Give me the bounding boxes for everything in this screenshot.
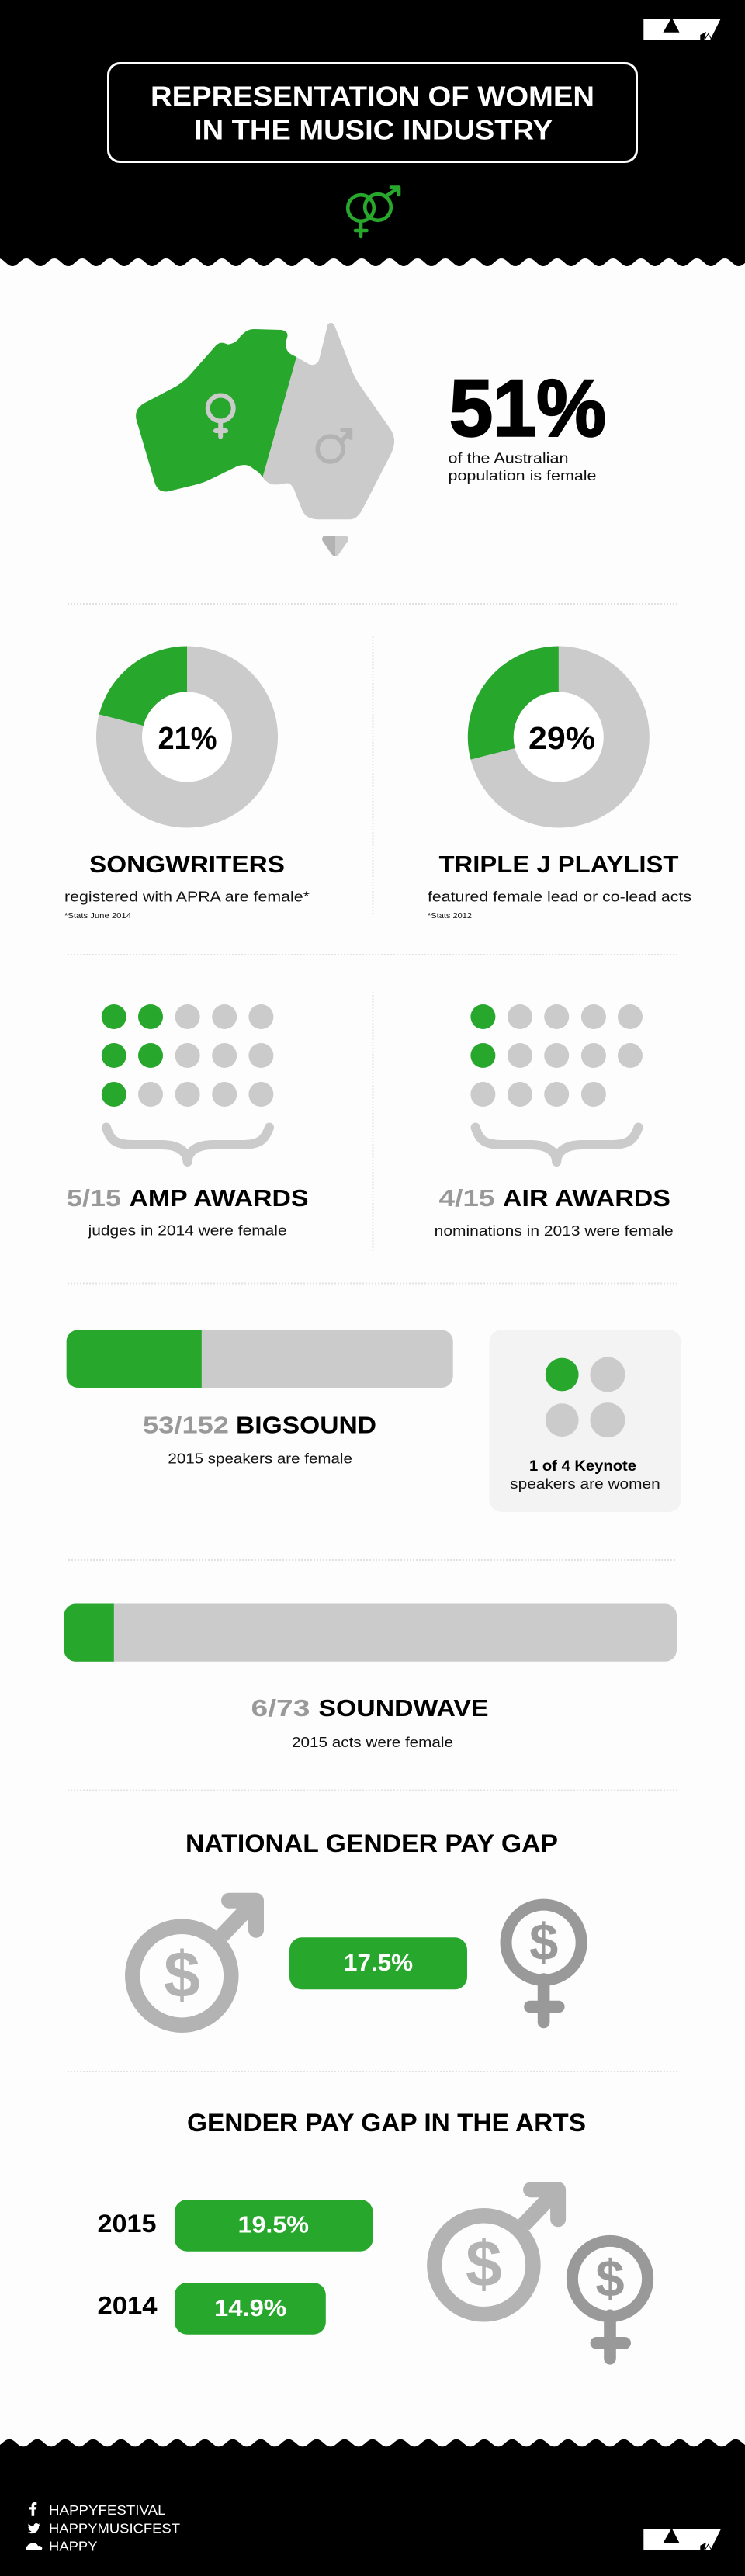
donut chart: 29% xyxy=(468,646,650,827)
header black wavy background xyxy=(0,0,745,266)
heading: triple j playlist: TRIPLE J PLAYLIST xyxy=(439,851,679,878)
brace xyxy=(476,1127,639,1162)
panel: keynote card: 1 of 4 Keynote xyxy=(529,1458,636,1475)
panel: songwriters xyxy=(64,646,310,920)
icon: mars with dollar: $ xyxy=(164,1938,200,2011)
panel: triple j playlist xyxy=(428,646,691,920)
brace xyxy=(106,1127,269,1162)
text: population caption: population is female xyxy=(449,467,596,484)
heading: 53/152 bigsound xyxy=(143,1411,376,1439)
heading: 53/152 bigsound: 53/152 xyxy=(143,1411,229,1439)
icon: mars on map xyxy=(317,430,351,462)
panel: keynote card: speakers are women xyxy=(510,1475,660,1492)
text: population caption xyxy=(449,450,596,484)
bar chart: 53 of 152 xyxy=(67,1330,453,1388)
Tasmania xyxy=(322,536,335,556)
panel: national gender pay gap xyxy=(133,1829,581,2025)
row: 2014: 2014 xyxy=(98,2292,158,2320)
icon: mars with dollar xyxy=(435,2189,558,2314)
heading: 6/73 soundwave: 6/73 xyxy=(251,1694,310,1721)
panel: soundwave xyxy=(64,1603,677,1750)
panel: header xyxy=(0,0,745,266)
row: 2015: 19.5% xyxy=(237,2211,309,2238)
dot grid: 5 of 15 xyxy=(102,1004,273,1107)
icon: venus with dollar xyxy=(572,2241,648,2359)
heading: 5/15 AMP awards: 5/15 xyxy=(67,1185,121,1212)
text: population caption: of the Australian xyxy=(449,450,568,466)
text: songwriters caption: registered with APRA are female* xyxy=(64,889,310,905)
footer black wavy background xyxy=(0,2439,745,2576)
text: AMP caption: judges in 2014 were female xyxy=(87,1222,287,1239)
logo: top right xyxy=(643,19,721,40)
donut chart: 21% xyxy=(96,646,278,827)
heading: 4/15 AIR awards: 4/15 xyxy=(439,1185,495,1212)
panel: bigsound xyxy=(67,1330,681,1512)
map of Australia split by gender xyxy=(136,323,394,556)
text: social handles: HAPPYFESTIVAL xyxy=(49,2502,166,2518)
panel: gender pay gap in the arts xyxy=(98,2109,648,2359)
note: songwriters stats date: *Stats June 2014 xyxy=(64,911,131,920)
title box xyxy=(109,64,636,161)
logo: bottom right xyxy=(643,2529,721,2550)
bar chart: 6 of 73 xyxy=(64,1603,677,1662)
text: triple j caption: featured female lead or co-lead acts xyxy=(428,889,691,905)
icon: mars with dollar: $ xyxy=(466,2228,502,2300)
heading: 5/15 AMP awards: AMP AWARDS xyxy=(129,1185,309,1212)
note: triple j stats date: *Stats 2012 xyxy=(428,911,472,920)
row: 2014 xyxy=(98,2283,326,2335)
panel: AIR awards xyxy=(435,1004,674,1239)
text: social handles: HAPPYMUSICFEST xyxy=(49,2520,180,2536)
row: 2014: 14.9% xyxy=(214,2294,286,2321)
heading: 53/152 bigsound: BIGSOUND xyxy=(236,1411,376,1439)
heading: 5/15 AMP awards xyxy=(67,1185,309,1212)
icon: venus on map xyxy=(208,396,234,436)
heading: 6/73 soundwave xyxy=(251,1694,489,1721)
text: bigsound caption: 2015 speakers are female xyxy=(168,1450,352,1467)
stat: 51%: 51% xyxy=(449,363,606,453)
panel: Australia population xyxy=(136,323,606,556)
text: AIR caption: nominations in 2013 were female xyxy=(435,1222,674,1239)
heading: songwriters: SONGWRITERS xyxy=(89,851,285,878)
heading: national gender pay gap: NATIONAL GENDER PAY GAP xyxy=(185,1829,558,1857)
title box: IN THE MUSIC INDUSTRY xyxy=(194,115,553,146)
icon: green gender symbols xyxy=(348,188,399,237)
pill: 17.5% xyxy=(289,1937,467,1989)
pill: 17.5%: 17.5% xyxy=(344,1949,413,1976)
heading: 4/15 AIR awards: AIR AWARDS xyxy=(503,1185,670,1212)
text: social handles xyxy=(49,2502,180,2554)
icon: twitter xyxy=(28,2523,40,2533)
heading: 4/15 AIR awards xyxy=(439,1185,670,1212)
donut chart: 29%: 29% xyxy=(528,720,595,756)
dot grid: 4 of 15 xyxy=(470,1004,643,1107)
heading: 6/73 soundwave: SOUNDWAVE xyxy=(318,1694,489,1721)
icon: venus with dollar xyxy=(506,1905,581,2023)
text: soundwave caption: 2015 acts were female xyxy=(292,1734,453,1750)
panel: keynote card xyxy=(489,1330,681,1512)
icon: soundcloud xyxy=(26,2543,42,2550)
text: social handles: HAPPY xyxy=(49,2539,98,2554)
panel: AMP awards xyxy=(67,1004,309,1239)
icon: venus with dollar: $ xyxy=(529,1913,558,1971)
icon: mars with dollar xyxy=(133,1901,256,2025)
icon: facebook xyxy=(29,2502,36,2516)
heading: gender pay gap in the arts: GENDER PAY GAP IN THE ARTS xyxy=(187,2109,586,2137)
row: 2015 xyxy=(98,2200,372,2252)
row: 2015: 2015 xyxy=(98,2210,157,2238)
title box: REPRESENTATION OF WOMEN xyxy=(151,81,594,112)
panel: footer xyxy=(0,2439,745,2576)
donut chart: 21%: 21% xyxy=(158,720,217,756)
icon: venus with dollar: $ xyxy=(595,2249,625,2307)
